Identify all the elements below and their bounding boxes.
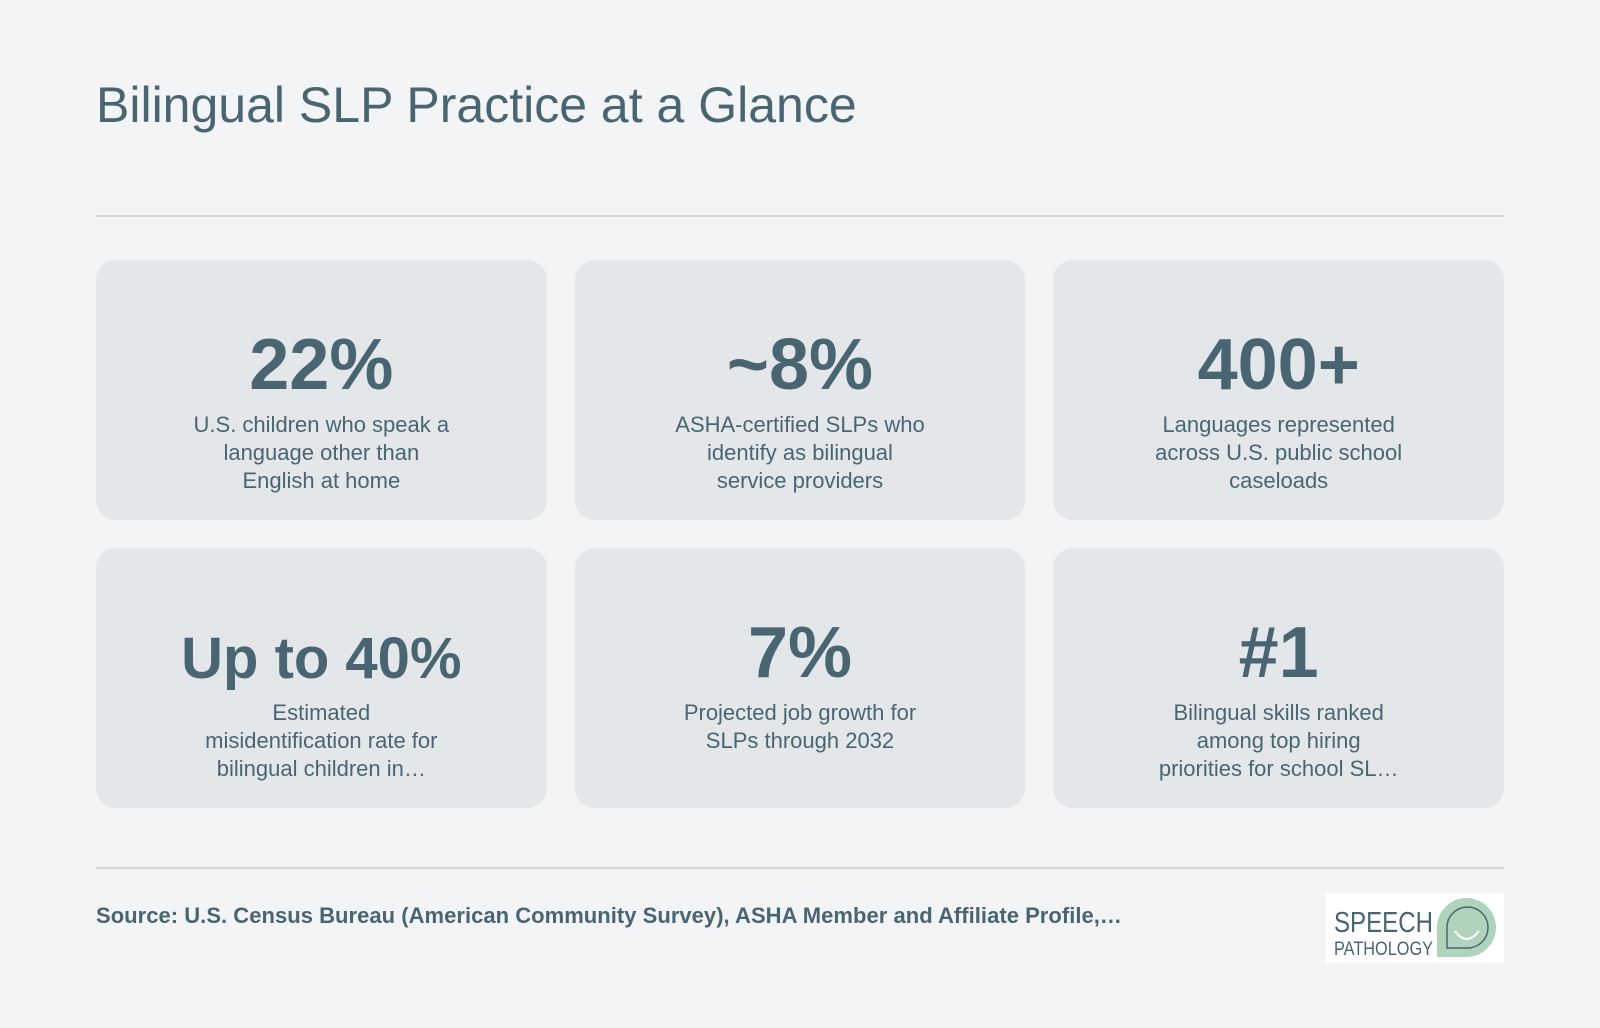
- logo wordmark: SPEECH: [1334, 907, 1433, 939]
- panel: 400+ stat: [1053, 260, 1504, 520]
- label: hiring priorities: priorities for school SL…: [1159, 756, 1398, 781]
- value: 22%: 22%: [249, 325, 393, 405]
- label: hiring priorities: among top hiring: [1197, 728, 1361, 753]
- icon: speech bubble: [1437, 898, 1496, 957]
- value: 400+: 400+: [1198, 325, 1360, 405]
- label: languages: Languages represented: [1162, 412, 1395, 437]
- value: 7%: 7%: [748, 613, 852, 693]
- panel: 7% stat: [575, 548, 1025, 808]
- panel: 22% stat: [96, 260, 547, 520]
- panel: up to 40% stat: [96, 548, 547, 808]
- label: languages: across U.S. public school: [1155, 440, 1402, 465]
- panel: 8% stat: [575, 260, 1025, 520]
- logo: Speech Pathology: [1326, 893, 1504, 963]
- source note: Source: U.S. Census Bureau (American Community Survey), ASHA Member and Affiliate Profile,…: [96, 903, 1122, 928]
- label: certified SLPs: [675, 412, 925, 493]
- label: misidentification: Estimated: [272, 700, 370, 725]
- label: job growth: Projected job growth for: [684, 700, 916, 725]
- logo wordmark: [1334, 907, 1433, 960]
- label: languages: [1155, 412, 1402, 493]
- label: job growth: SLPs through 2032: [706, 728, 894, 753]
- label: job growth: [684, 700, 916, 753]
- label: children language: [194, 412, 450, 493]
- label: children language: English at home: [242, 468, 400, 493]
- label: misidentification: [205, 700, 438, 781]
- title: Bilingual SLP Practice at a Glance: [96, 76, 857, 132]
- value: #1: #1: [1239, 613, 1319, 693]
- label: certified SLPs: service providers: [717, 468, 883, 493]
- label: hiring priorities: Bilingual skills ranked: [1173, 700, 1384, 725]
- value: ~8%: ~8%: [727, 325, 873, 405]
- label: misidentification: misidentification rate for: [205, 728, 437, 753]
- label: children language: U.S. children who speak a: [194, 412, 449, 437]
- label: certified SLPs: identify as bilingual: [707, 440, 893, 465]
- panel: #1 stat: [1053, 548, 1504, 808]
- logo wordmark: PATHOLOGY: [1334, 939, 1433, 960]
- label: certified SLPs: ASHA-certified SLPs who: [675, 412, 925, 437]
- label: languages: caseloads: [1229, 468, 1328, 493]
- value: Up to 40%: Up to 40%: [181, 626, 462, 691]
- label: hiring priorities: [1159, 700, 1398, 781]
- label: children language: language other than: [223, 440, 419, 465]
- label: misidentification: bilingual children in…: [217, 756, 426, 781]
